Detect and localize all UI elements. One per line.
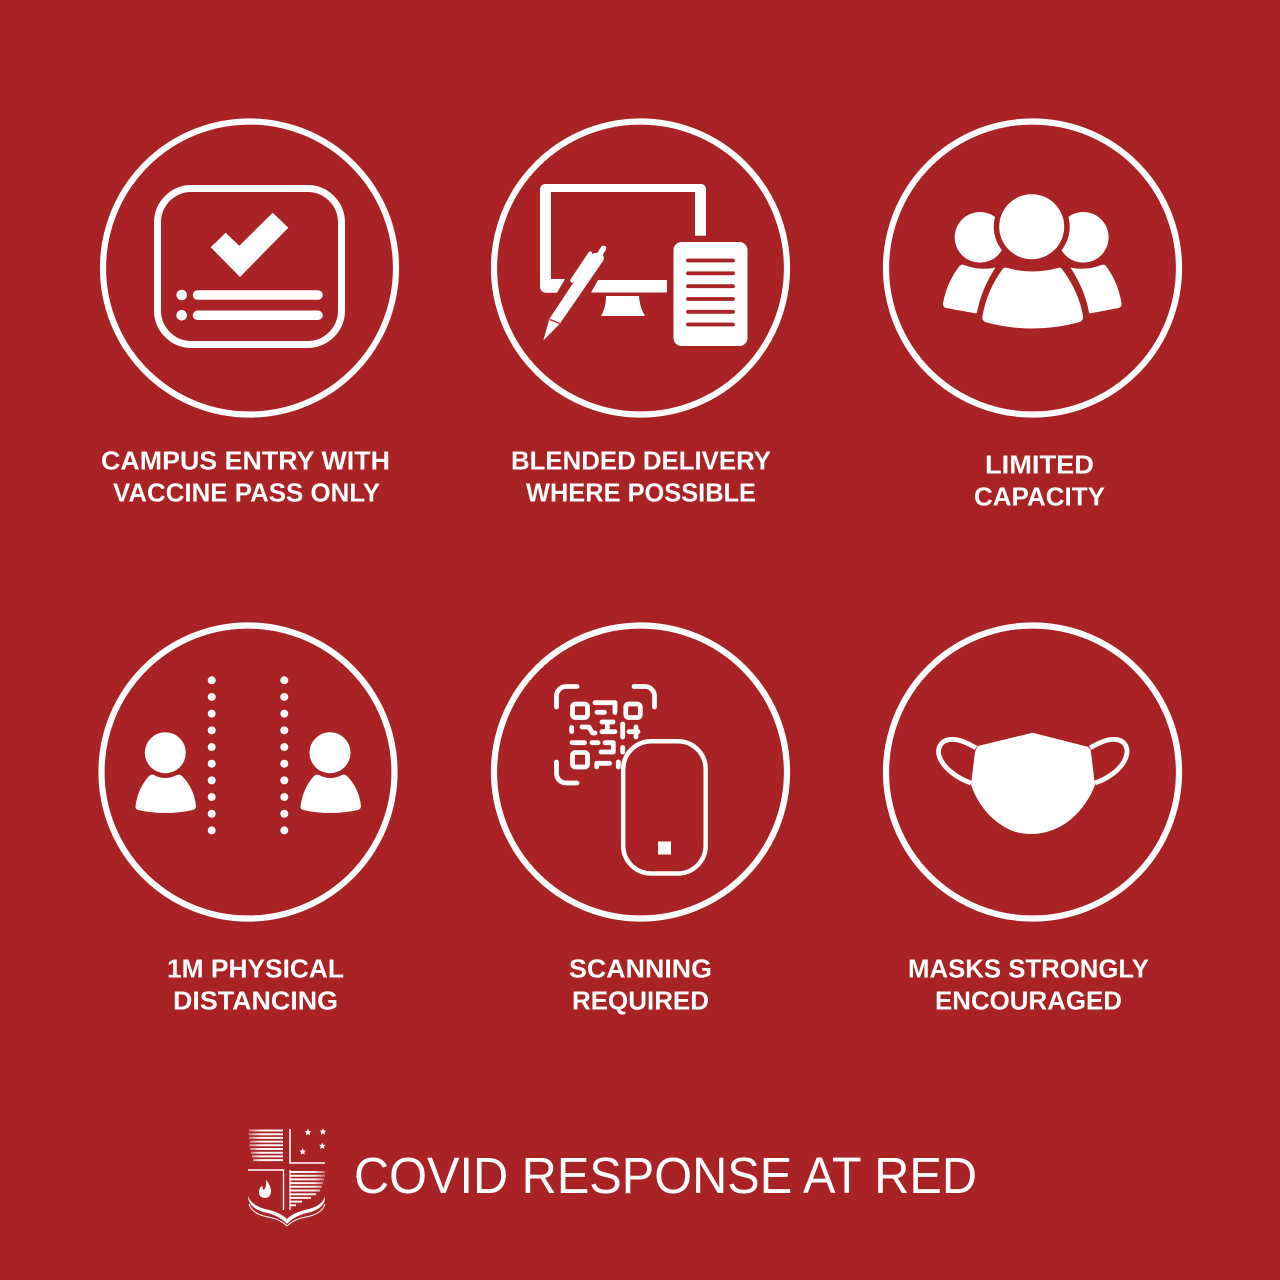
label — [167, 956, 344, 1016]
icon: group of people — [943, 189, 1122, 328]
label: BLENDED DELIVERY — [511, 448, 771, 476]
label: SCANNING — [569, 956, 712, 984]
label: LIMITED — [985, 452, 1094, 480]
icon: college crest — [248, 1128, 326, 1226]
panel: masks strongly encouraged — [886, 626, 1179, 1016]
icon ring — [102, 626, 394, 918]
label — [974, 452, 1105, 512]
label: CAMPUS ENTRY WITH — [101, 448, 390, 476]
label: VACCINE PASS ONLY — [113, 480, 380, 508]
title: COVID RESPONSE AT RED — [354, 1147, 977, 1204]
panel: blended delivery — [494, 122, 787, 508]
label: 1M PHYSICAL — [167, 956, 344, 984]
label — [908, 956, 1149, 1016]
panel: scanning required — [494, 626, 787, 1016]
label: MASKS STRONGLY — [908, 956, 1149, 984]
label: WHERE POSSIBLE — [526, 480, 756, 508]
label — [569, 956, 712, 1016]
footer: emblem and title — [248, 1128, 977, 1226]
icon: vaccine pass card with checkmark — [158, 188, 342, 344]
icon: two people separated by dotted lines — [135, 680, 361, 847]
icon ring — [494, 122, 787, 414]
label: CAPACITY — [974, 484, 1105, 512]
label: REQUIRED — [572, 988, 709, 1016]
icon ring — [886, 626, 1179, 918]
icon: QR code and phone — [556, 686, 706, 874]
label: DISTANCING — [173, 988, 338, 1016]
panel: limited capacity — [886, 122, 1179, 512]
label — [101, 448, 390, 508]
pen — [543, 246, 606, 340]
panel: campus entry with vaccine pass — [101, 122, 396, 508]
panel: physical distancing — [102, 626, 394, 1016]
label: ENCOURAGED — [935, 988, 1122, 1016]
icon ring — [103, 122, 396, 414]
icon ring — [494, 626, 787, 918]
icon: monitor, pen and document — [540, 184, 748, 346]
label — [511, 448, 771, 508]
icon ring — [886, 122, 1179, 414]
icon: face mask — [939, 733, 1127, 834]
